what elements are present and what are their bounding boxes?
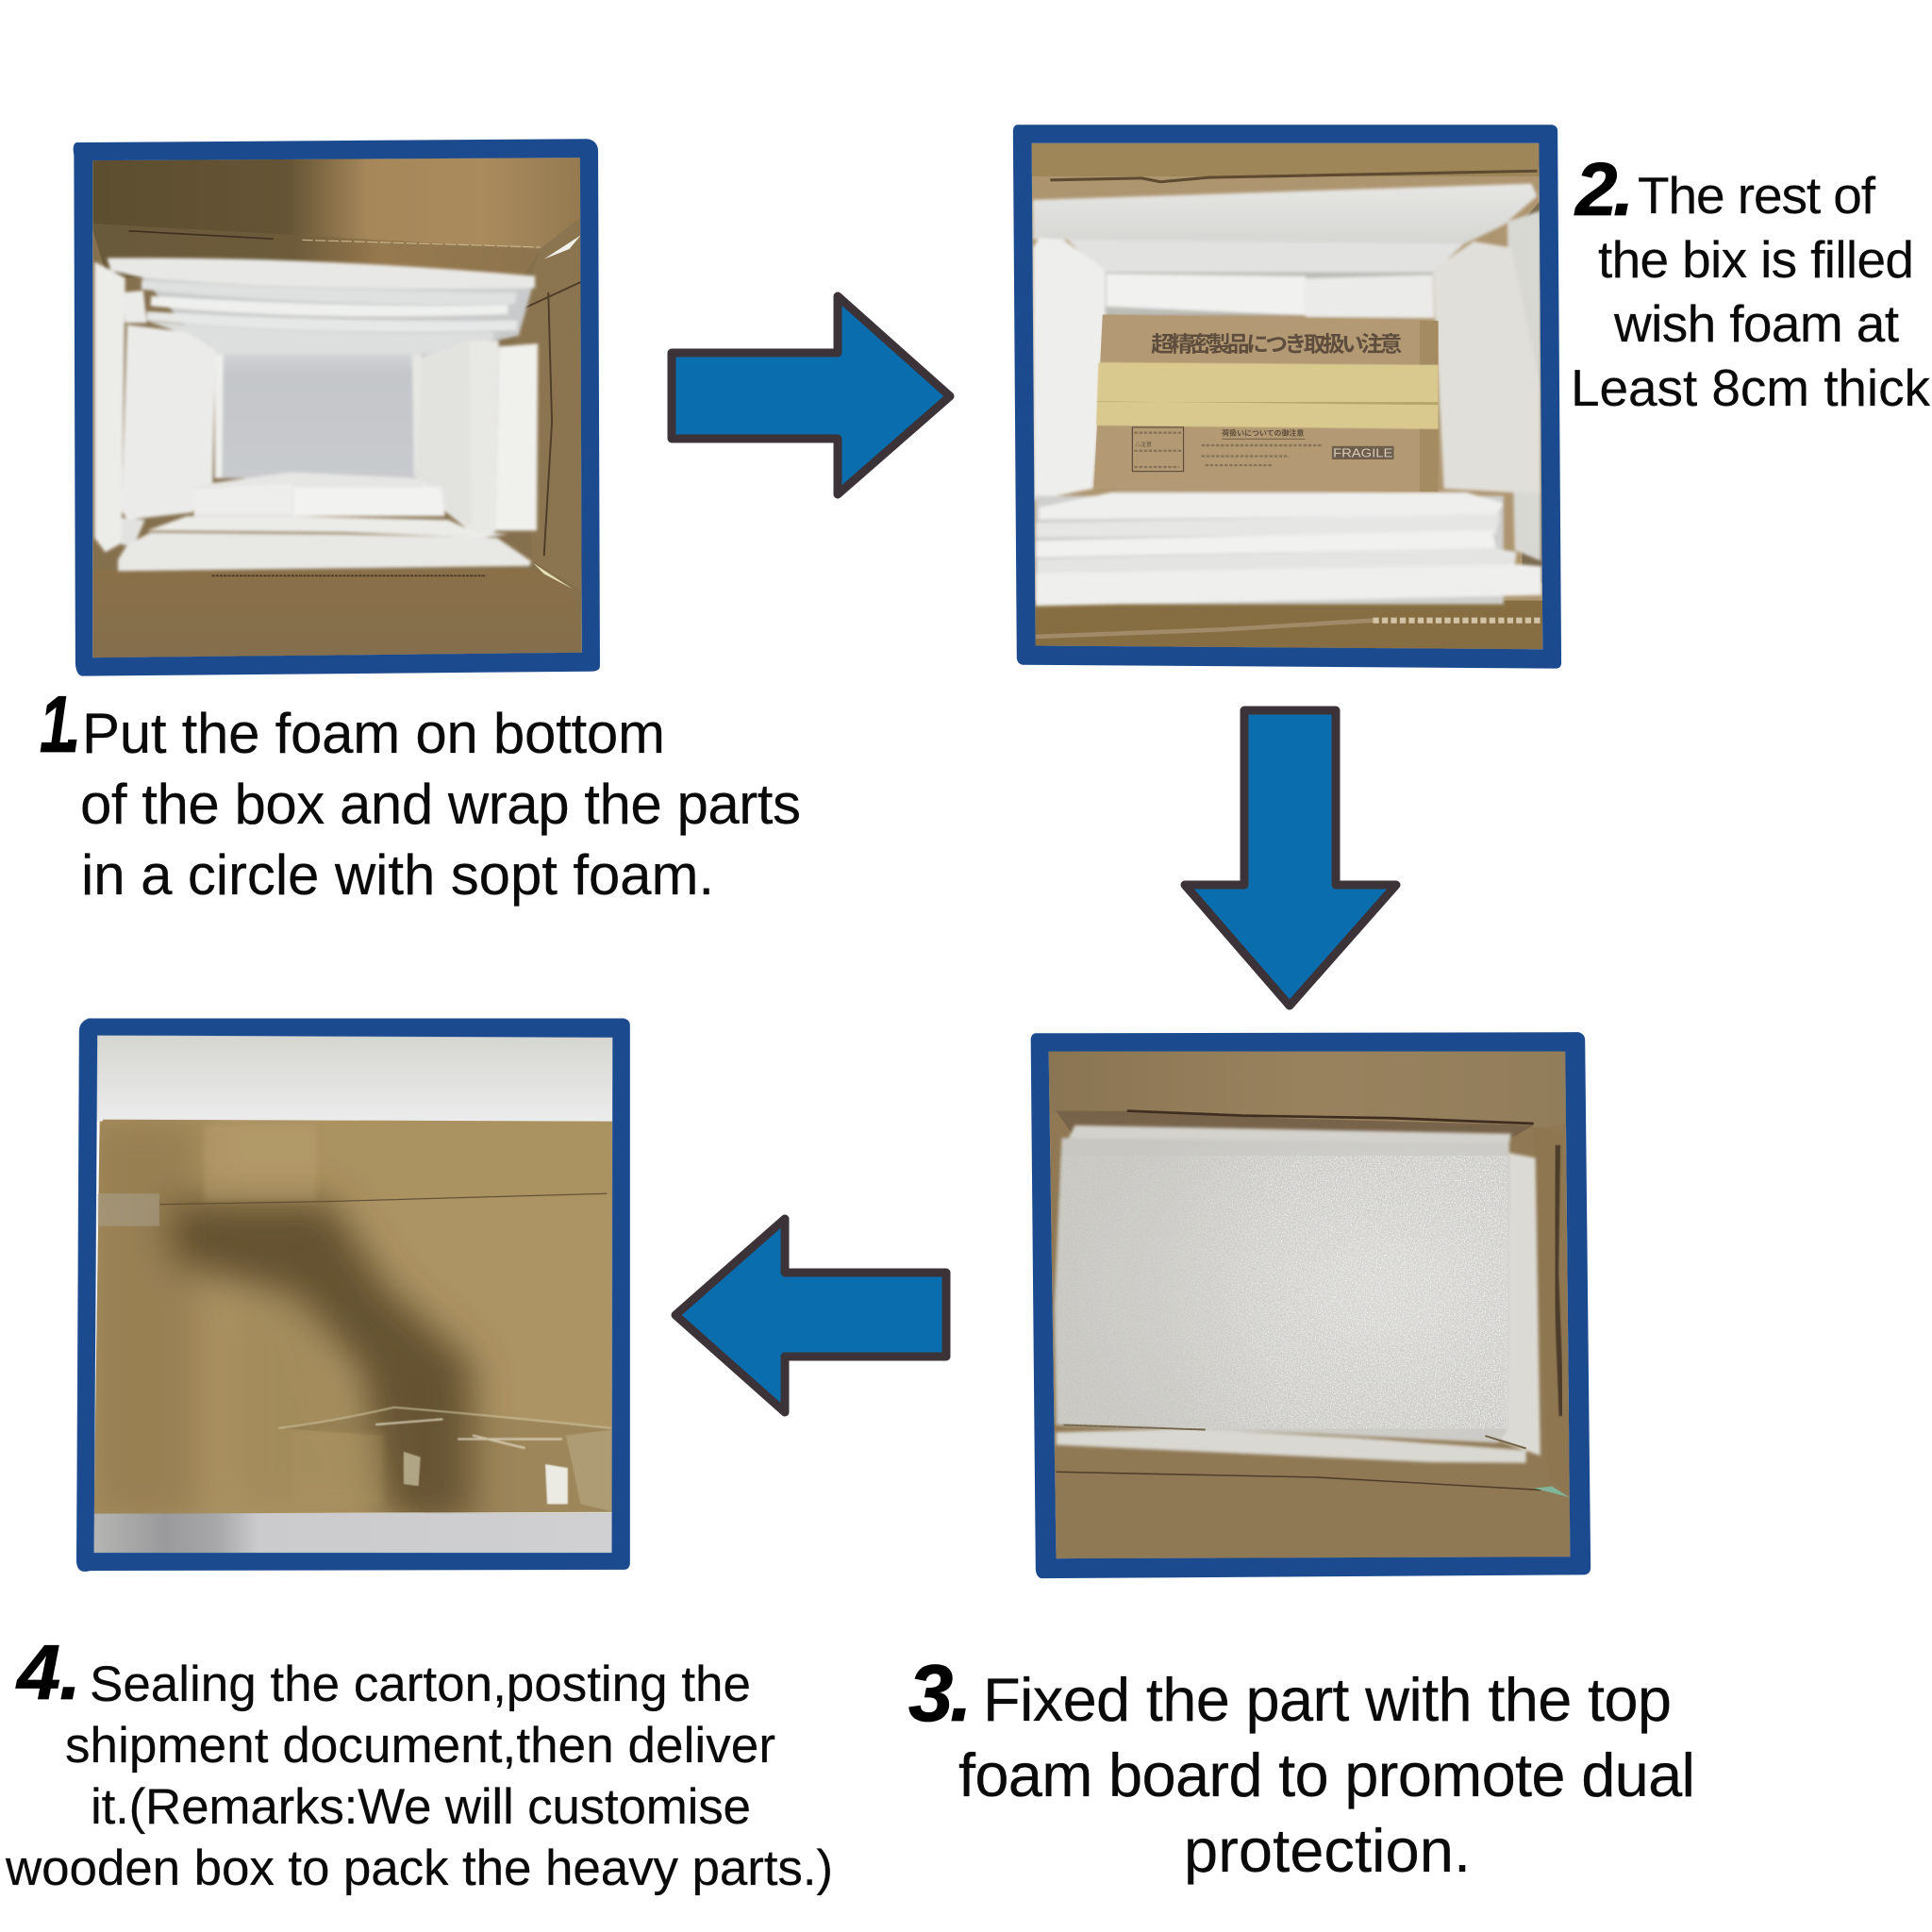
step 3 photo panel: top foam board xyxy=(1031,1032,1591,1578)
step 4 photo panel: sealed carton xyxy=(76,1019,630,1572)
step 2 photo panel: box inside foam xyxy=(1013,125,1561,669)
cardboard inner box xyxy=(1094,315,1439,491)
arrow: step 3 to step 4 xyxy=(675,1219,946,1412)
step 2 caption: . xyxy=(1613,147,1634,231)
step 3 caption: Fixed the part with the top xyxy=(983,1665,1672,1734)
step 4 caption: wooden box to pack the heavy parts.) xyxy=(5,1840,833,1896)
step 1 photo panel: open box with foam lining xyxy=(74,139,600,676)
step 2 caption xyxy=(1571,147,1930,417)
step 4 caption: 4 xyxy=(17,1628,60,1716)
step 1 caption: 1 xyxy=(40,679,72,769)
step 1 caption: . xyxy=(65,679,81,769)
carton handling label: 荷扱いについての御注意 xyxy=(1222,428,1304,438)
foam speckle texture xyxy=(1059,1156,1507,1428)
step 3 caption: protection. xyxy=(1184,1816,1471,1885)
step 2 blue frame xyxy=(1013,125,1561,669)
step 4 caption: . xyxy=(59,1628,81,1716)
FRAGILE stamp: FRAGILE xyxy=(1333,446,1393,460)
carton handling label: △注意 xyxy=(1135,441,1152,448)
step 3 blue frame xyxy=(1031,1032,1591,1578)
step 1 caption: of the box and wrap the parts xyxy=(80,773,801,836)
arrow: step 1 to step 2 xyxy=(672,296,950,494)
step 2 caption: the bix is filled xyxy=(1598,230,1914,289)
step 2 caption: wish foam at xyxy=(1613,294,1899,353)
carton warning text: 超精密製品につき取扱い注意 xyxy=(1151,332,1402,356)
step 3 caption xyxy=(908,1649,1695,1885)
step 3 caption: . xyxy=(950,1649,973,1739)
step 2 caption: 2 xyxy=(1575,147,1617,231)
step 4 caption: Sealing the carton,posting the xyxy=(90,1657,751,1712)
step 1 blue frame xyxy=(74,139,600,676)
carton handling label xyxy=(1132,427,1323,472)
step 4 caption: it.(Remarks:We will customise xyxy=(91,1779,751,1835)
step 3 caption: foam board to promote dual xyxy=(958,1740,1695,1809)
step 1 caption xyxy=(40,679,801,907)
packing tape highlights xyxy=(278,1407,611,1513)
step 3 caption: 3 xyxy=(908,1649,953,1739)
step 1 caption: in a circle with sopt foam. xyxy=(81,843,714,907)
arrow: step 2 to step 3 xyxy=(1185,710,1396,1006)
step 2 caption: Least 8cm thick xyxy=(1571,358,1930,417)
step 4 caption: shipment document,then deliver xyxy=(65,1718,775,1774)
step 2 caption: The rest of xyxy=(1638,166,1876,225)
step 1 caption: Put the foam on bottom xyxy=(82,702,665,765)
step 4 caption xyxy=(5,1628,833,1896)
step 4 blue frame xyxy=(76,1019,630,1572)
